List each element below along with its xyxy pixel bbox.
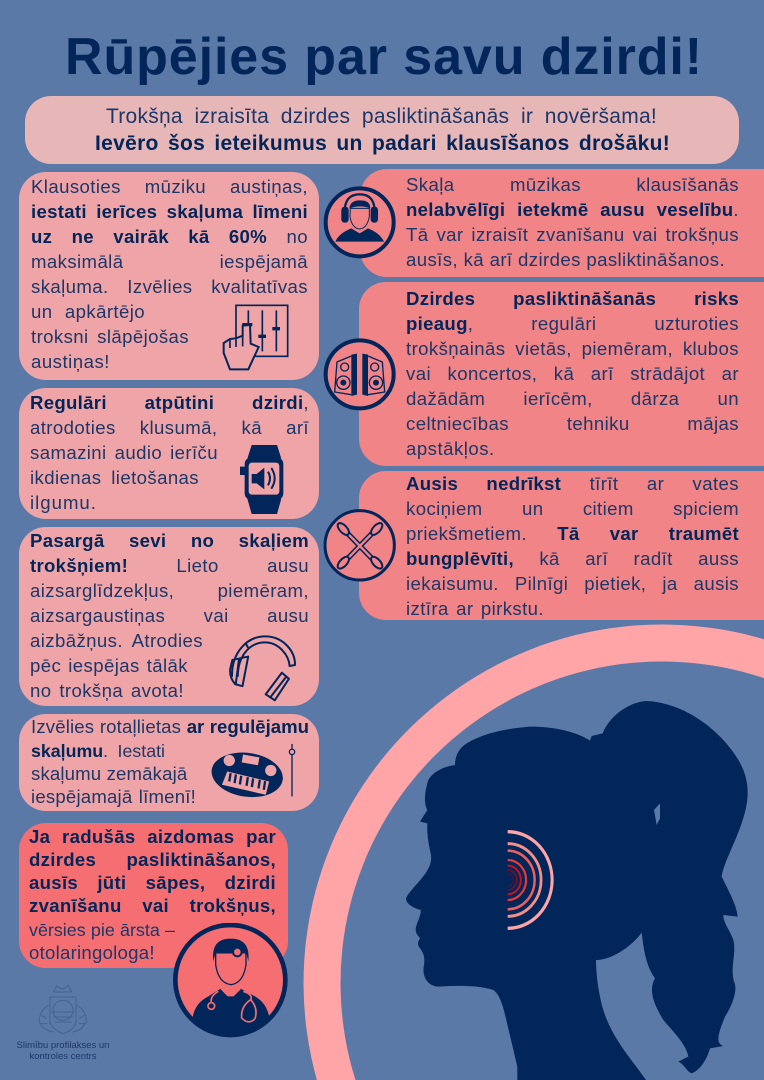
panel: volume limit: iestati ierīces skaļuma līmeni — [31, 201, 308, 222]
head silhouette with sound waves in the ear — [406, 701, 748, 1080]
panel: protect from loud noise: Pasargā sevi no skaļiem — [30, 530, 309, 551]
panel: noisy places: apstākļos. — [406, 438, 495, 459]
panel: volume limit: maksimālā iespējamā — [31, 251, 308, 272]
logo caption: Slimību profilakses un — [17, 1040, 109, 1051]
panel: music volume affects ears: Skaļa mūzikas klausīšanās — [406, 174, 739, 195]
panel: protect from loud noise: aizsarglīdzekļus, piemēram, — [30, 580, 309, 601]
icon: person with headset — [324, 186, 396, 258]
panel: volume limit: un apkārtējo — [31, 301, 145, 322]
panel: rest your hearing: ikdienas lietošanas — [30, 467, 199, 488]
panel: noisy places: pieaug, regulāri uzturoties — [406, 313, 739, 334]
icon: crossed cotton swabs — [324, 509, 396, 582]
icon: speakers — [324, 338, 396, 410]
panel: protect from loud noise: no trokšņa avota! — [30, 680, 184, 701]
logo caption — [17, 1040, 109, 1062]
panel: cleaning ears: priekšmetiem. Tā var traumēt — [406, 523, 739, 544]
title: Rūpējies par savu dzirdi! — [65, 28, 703, 86]
panel: rest your hearing: atrodoties klusumā, kā arī — [30, 417, 309, 438]
panel: protect from loud noise: trokšņiem! Lieto ausu — [30, 555, 309, 576]
panel: protect from loud noise: aizbāžņus. Atrodies — [30, 630, 203, 651]
panel: toys with adjustable volume: iespējamajā līmenī! — [31, 786, 196, 807]
panel: noisy places — [359, 282, 764, 466]
panel: rest your hearing — [19, 388, 319, 519]
panel: volume limit — [19, 172, 319, 380]
panel: volume limit: Klausoties mūziku austiņas, — [31, 176, 308, 197]
panel: see a doctor: ausīs jūti sāpes, dzirdi — [29, 872, 276, 893]
panel: toys with adjustable volume — [19, 714, 319, 811]
panel: see a doctor: otolaringologa! — [29, 942, 155, 963]
panel: toys with adjustable volume: Izvēlies rotaļlietas ar regulējamu — [31, 716, 309, 737]
panel: volume limit: skaļuma. Izvēlies kvalitatīvas — [31, 276, 308, 297]
panel: music volume affects ears: Tā var izraisīt zvanīšanu vai trokšņus — [406, 224, 739, 245]
panel: volume limit: austiņas! — [31, 351, 110, 372]
panel: volume limit: troksni slāpējošas — [31, 326, 189, 347]
logo: crest — [38, 984, 86, 1034]
logo caption: kontroles centrs — [29, 1051, 97, 1062]
panel: toys with adjustable volume: skaļumu. Iestati — [31, 741, 165, 761]
panel: cleaning ears — [359, 471, 764, 620]
panel: cleaning ears: iekaisumu. Pilnīgi pietiek, ja ausis — [406, 573, 739, 594]
panel: rest your hearing: Regulāri atpūtini dzirdi, — [30, 392, 309, 413]
icon: mixer with hand — [222, 304, 288, 370]
panel: volume limit: uz ne vairāk kā 60% no — [31, 226, 308, 247]
icon: headphones — [229, 635, 296, 702]
panel: see a doctor — [19, 823, 288, 968]
banner: Ievēro šos ieteikumus un padari klausīšanos drošāku! — [95, 132, 670, 155]
panel: noisy places: vai koncertos, kā arī strādājot ar — [406, 363, 739, 384]
panel: cleaning ears: Ausis nedrīkst tīrīt ar vates — [406, 473, 739, 494]
banner: Trokšņa izraisīta dzirdes pasliktināšanās ir novēršama! — [106, 105, 657, 128]
panel: cleaning ears: iztīra ar pirkstu. — [406, 598, 544, 619]
panel: toys with adjustable volume: skaļumu zemākajā — [31, 763, 187, 784]
banner — [25, 96, 739, 164]
panel: noisy places: Dzirdes pasliktināšanās risks — [406, 288, 739, 309]
panel: music volume affects ears: nelabvēlīgi ietekmē ausu veselību. — [406, 199, 739, 220]
icon: toy keyboard and volume slider — [212, 744, 296, 798]
panel: protect from loud noise: aizsargaustiņas vai ausu — [30, 605, 309, 626]
panel: noisy places: trokšņainās vietās, piemēram, klubos — [406, 338, 739, 359]
panel: cleaning ears: bungplēvīti, kā arī radīt auss — [406, 548, 739, 569]
icon: doctor — [173, 923, 288, 1038]
panel: cleaning ears: kociņiem un citiem spiciem — [406, 498, 739, 519]
panel: music volume affects ears: ausīs, kā arī dzirdes pasliktināšanos. — [406, 249, 725, 270]
panel: see a doctor: dzirdes pasliktināšanos, — [29, 849, 276, 870]
icon: smart watch — [240, 445, 284, 514]
panel: see a doctor: zvanīšanu vai trokšņus, — [29, 895, 276, 916]
panel: see a doctor: Ja radušās aizdomas par — [29, 826, 276, 847]
panel: see a doctor: vērsies pie ārsta – — [29, 920, 175, 940]
panel: noisy places: celtniecības tehniku mājas — [406, 413, 739, 434]
panel: protect from loud noise: pēc iespējas tālāk — [30, 655, 188, 676]
panel: noisy places: dažādām ierīcēm, dārza un — [406, 388, 739, 409]
panel: rest your hearing: ilgumu. — [30, 492, 97, 513]
panel: protect from loud noise — [19, 527, 319, 706]
panel: music volume affects ears — [360, 169, 764, 277]
panel: rest your hearing: samazini audio ierīču — [30, 442, 218, 463]
